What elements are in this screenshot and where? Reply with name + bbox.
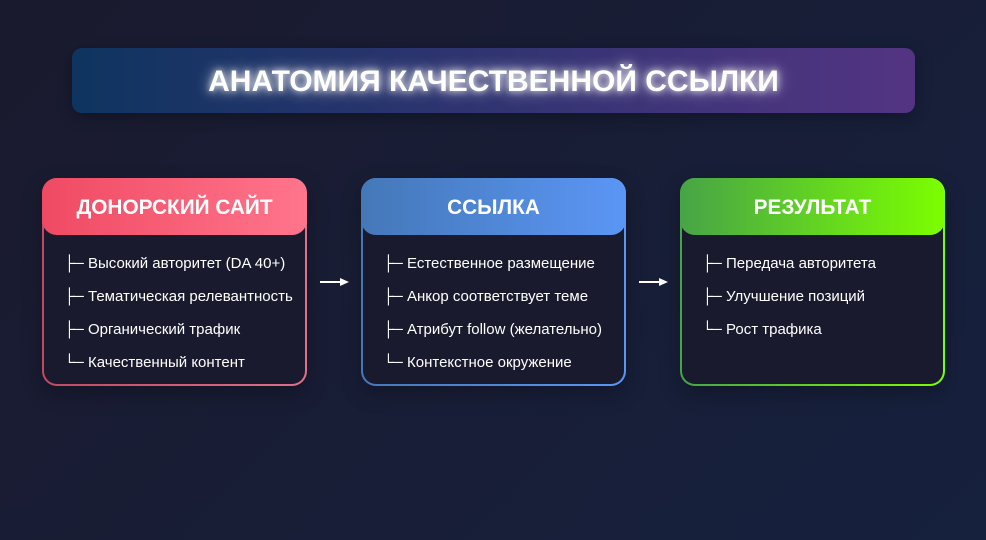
panel: link: Контекстное окружение xyxy=(407,354,572,371)
panel: donor site: Качественный контент xyxy=(88,354,245,371)
heading: donor site: ДОНОРСКИЙ САЙТ xyxy=(76,196,273,219)
list item: rankings xyxy=(702,287,865,306)
heading: donor site xyxy=(42,178,307,235)
panel: result: Улучшение позиций xyxy=(726,288,865,305)
panel: donor site: Органический трафик xyxy=(88,321,240,338)
arrow: link to result xyxy=(639,278,668,286)
panel: donor site: ├─ xyxy=(64,288,82,305)
list item: organic traffic xyxy=(64,320,240,338)
list item: quality content xyxy=(64,353,245,371)
list item: authority xyxy=(64,254,285,272)
heading: link xyxy=(361,178,626,235)
list item: context xyxy=(383,353,572,371)
heading: link: ССЫЛКА xyxy=(447,196,540,219)
panel: result: └─ xyxy=(702,321,720,338)
heading: result xyxy=(680,178,945,235)
panel: result: ├─ xyxy=(702,288,720,305)
panel: donor site: Тематическая релевантность xyxy=(88,288,293,305)
list item: follow attribute xyxy=(383,320,602,338)
panel: donor site: Высокий авторитет (DA 40+) xyxy=(88,255,285,272)
panel: result: Рост трафика xyxy=(726,321,822,338)
list item: traffic growth xyxy=(702,320,822,338)
panel: result: ├─ xyxy=(702,255,720,272)
panel: link: Атрибут follow (желательно) xyxy=(407,321,602,338)
panel: link: Естественное размещение xyxy=(407,255,595,272)
list item: authority transfer xyxy=(702,254,876,272)
panel: result xyxy=(680,178,945,386)
panel: donor site: ├─ xyxy=(64,255,82,272)
title banner xyxy=(72,48,915,113)
list item: natural placement xyxy=(383,254,595,272)
arrow: donor to link xyxy=(320,278,349,286)
panel: donor site: ├─ xyxy=(64,321,82,338)
panel: donor site: └─ xyxy=(64,354,82,371)
heading: result: РЕЗУЛЬТАТ xyxy=(754,196,871,219)
panel: result: Передача авторитета xyxy=(726,255,876,272)
panel: link xyxy=(361,178,626,386)
panel: link: ├─ xyxy=(383,288,401,305)
list item: anchor xyxy=(383,287,588,306)
panel: link: ├─ xyxy=(383,321,401,338)
list item: relevance xyxy=(64,287,293,306)
panel: link: └─ xyxy=(383,354,401,371)
panel: donor site xyxy=(42,178,307,386)
panel: link: ├─ xyxy=(383,255,401,272)
panel: link: Анкор соответствует теме xyxy=(407,288,588,305)
title banner: АНАТОМИЯ КАЧЕСТВЕННОЙ ССЫЛКИ xyxy=(208,65,779,98)
